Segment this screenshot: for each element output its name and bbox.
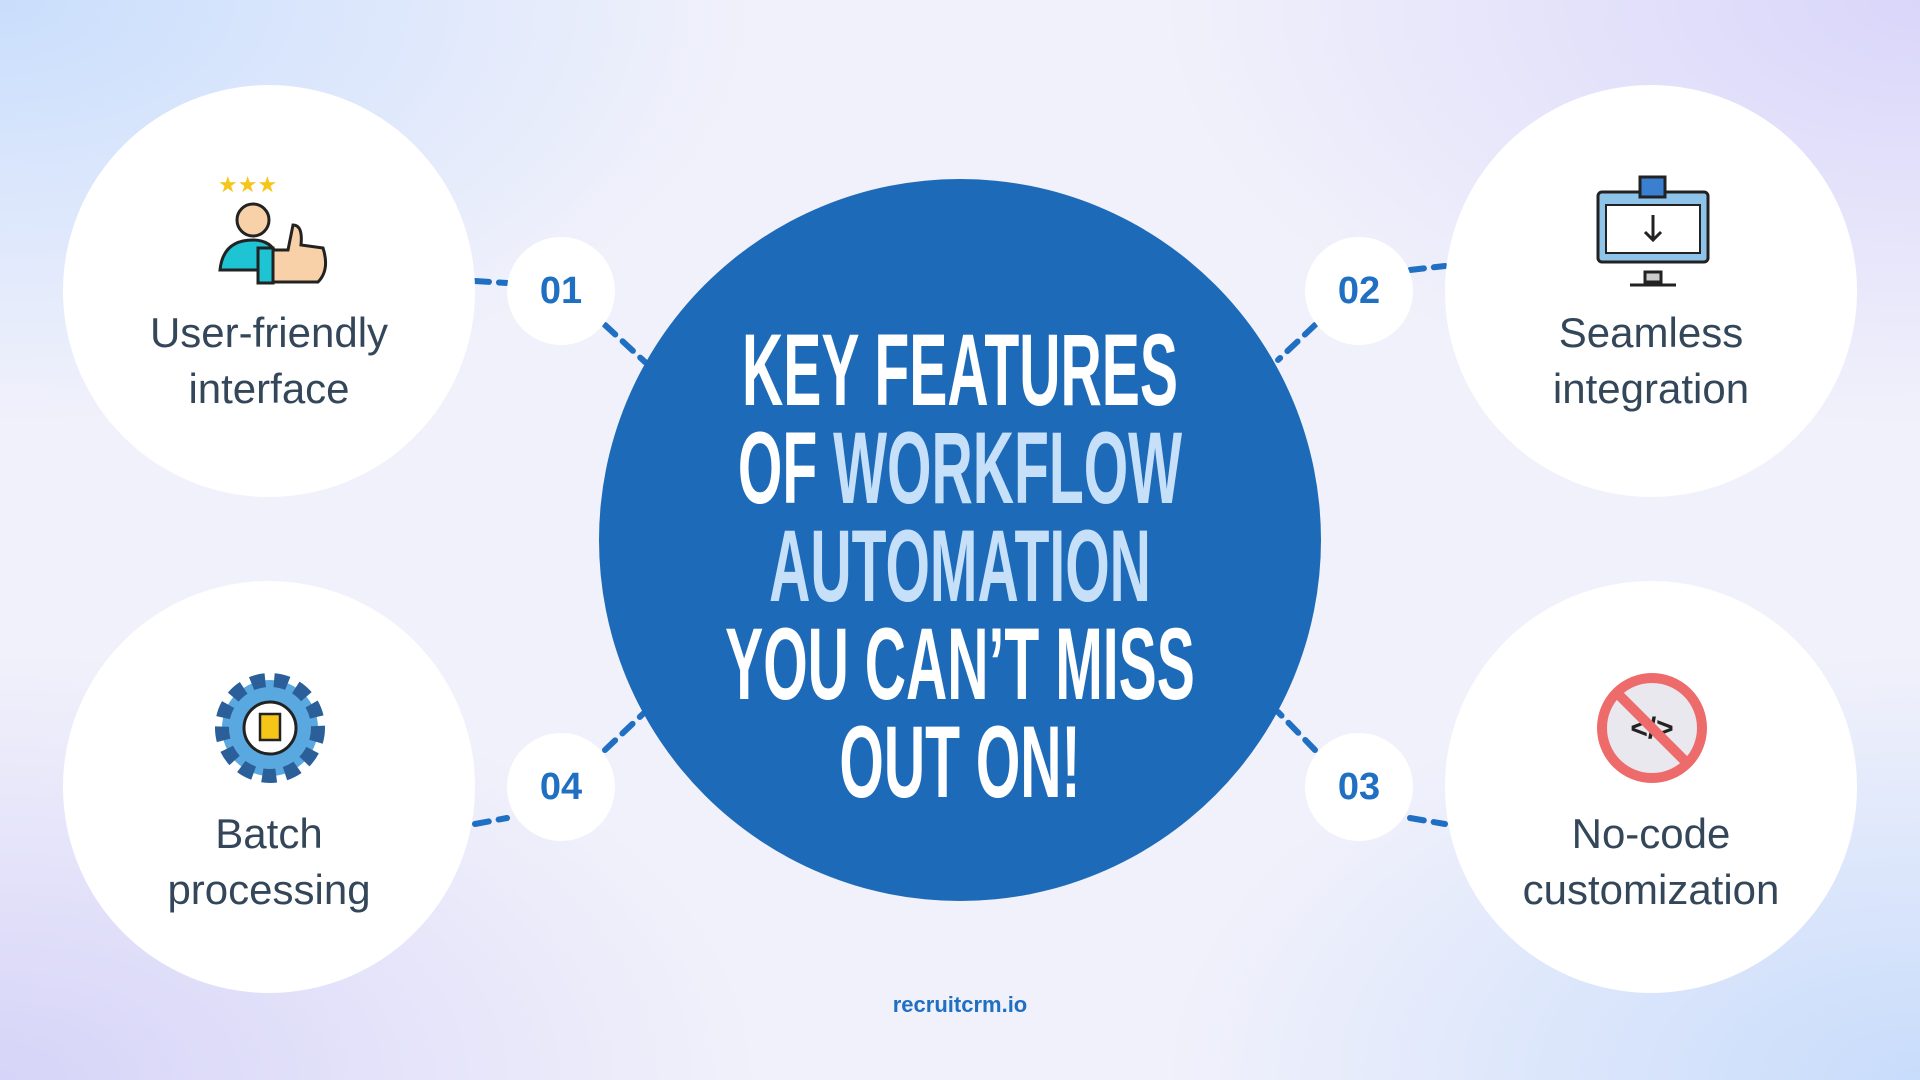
footer brand: recruitcrm.io: [893, 992, 1027, 1017]
icon: no code: [1597, 673, 1707, 783]
title: AUTOMATION: [769, 509, 1151, 623]
label: [1553, 309, 1749, 412]
title: OUT ON!: [839, 705, 1081, 819]
icon: gear document: [215, 673, 325, 783]
center circle title: [599, 179, 1321, 901]
number 01: [507, 237, 615, 345]
number 02: [1305, 237, 1413, 345]
title: [725, 313, 1195, 819]
number 03: 03: [1338, 766, 1380, 808]
number 02: 02: [1338, 270, 1380, 312]
label: [167, 810, 371, 913]
icon: no code: </>: [1630, 712, 1674, 745]
title: KEY FEATURES: [742, 313, 1178, 427]
label: [150, 309, 388, 412]
icon: user thumbs up: ★★★: [218, 172, 277, 197]
number 01: 01: [540, 270, 582, 312]
panel: seamless integration: [1445, 85, 1857, 497]
number 04: [507, 733, 615, 841]
label: interface: [188, 365, 350, 412]
panel: user-friendly interface: [63, 85, 475, 497]
label: [1523, 810, 1779, 913]
panel: no-code customization: [1445, 581, 1857, 993]
icon: monitor puzzle: [1596, 176, 1710, 286]
label: processing: [167, 866, 371, 913]
icon: user thumbs up: [218, 172, 328, 284]
title: YOU CAN’T MISS: [725, 607, 1195, 721]
title: OF WORKFLOW: [738, 411, 1182, 525]
label: integration: [1553, 365, 1749, 412]
label: customization: [1523, 866, 1779, 913]
number 04: 04: [540, 766, 582, 808]
label: No-code: [1572, 810, 1730, 857]
panel: batch processing: [63, 581, 475, 993]
label: User-friendly: [150, 309, 388, 356]
label: Seamless: [1559, 309, 1743, 356]
number 03: [1305, 733, 1413, 841]
label: Batch: [215, 810, 323, 857]
